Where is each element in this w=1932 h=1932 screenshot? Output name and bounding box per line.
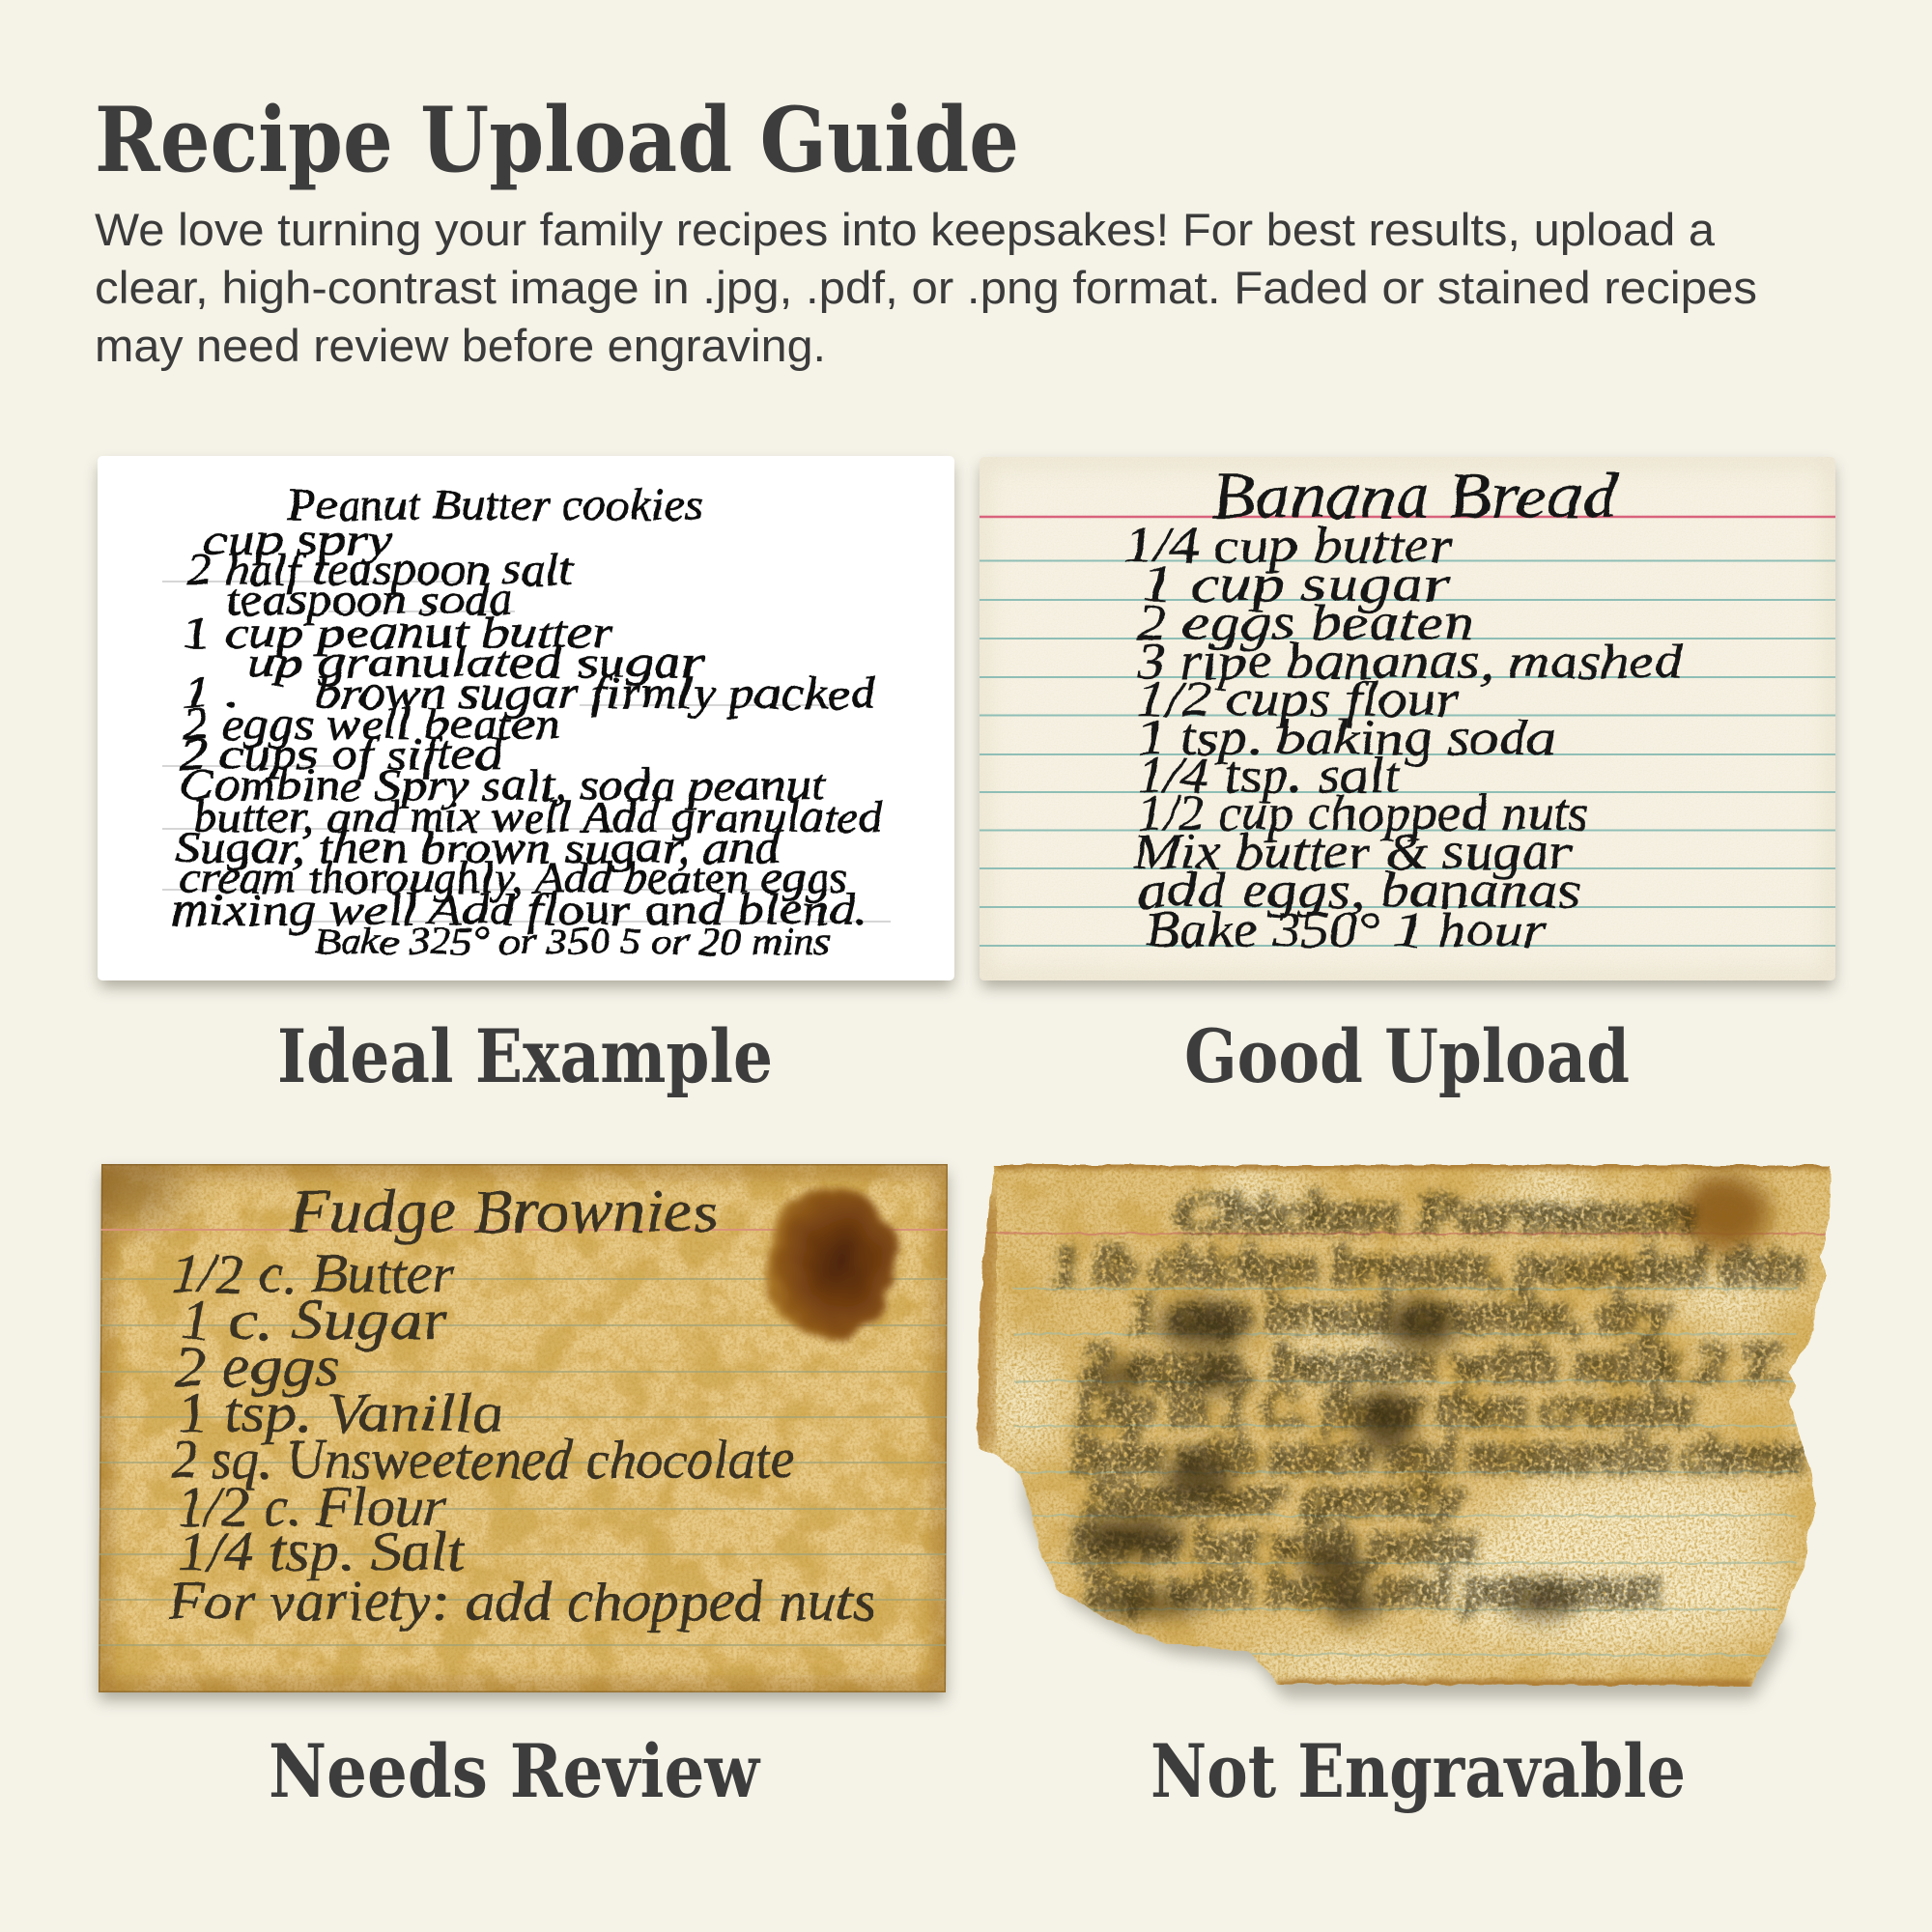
blurred illegible handwriting: Top with basil and parmesan bbox=[1082, 1558, 1662, 1616]
handwritten recipe: banana bread: 1/2 cups flour bbox=[1137, 671, 1458, 727]
handwritten recipe: fudge brownies: 2 sq. Unsweetened chocolate bbox=[171, 1428, 794, 1491]
handwritten recipe: banana bread: Mix butter & sugar bbox=[1132, 824, 1572, 880]
handwritten recipe: fudge brownies: 1/2 c. Butter bbox=[171, 1242, 454, 1305]
handwritten recipe: banana bread: 1/2 cup chopped nuts bbox=[1137, 785, 1589, 841]
handwritten recipe: fudge brownies bbox=[167, 1177, 875, 1633]
handwritten recipe: fudge brownies: 1/4 tsp. Salt bbox=[177, 1520, 466, 1582]
blurred illegible handwriting: Serve hot with pasta bbox=[1072, 1514, 1478, 1572]
handwritten recipe: banana bread: add eggs, bananas bbox=[1137, 863, 1581, 919]
handwritten recipe: peanut butter cookies: 1 . bbox=[183, 668, 241, 719]
panel: ideal example card bbox=[98, 456, 954, 987]
intro paragraph bbox=[95, 204, 1757, 371]
handwritten recipe: banana bread: 1 cup sugar bbox=[1142, 556, 1449, 612]
panel: good upload card bbox=[980, 457, 1835, 987]
blurred illegible handwriting: Chicken Parmesan bbox=[1176, 1184, 1697, 1242]
handwritten recipe: fudge brownies: For variety: add chopped nuts bbox=[167, 1570, 875, 1633]
intro paragraph: may need review before engraving. bbox=[95, 320, 826, 371]
handwritten recipe: fudge brownies: Fudge Brownies bbox=[289, 1177, 718, 1245]
handwritten recipe: peanut butter cookies: Combine Spry salt, soda peanut bbox=[180, 760, 827, 810]
ink bleed blotches bbox=[1077, 1300, 1574, 1621]
handwritten recipe: peanut butter cookies: 2 eggs well beaten bbox=[183, 699, 559, 750]
handwritten recipe: peanut butter cookies: Peanut Butter cookies bbox=[286, 480, 703, 530]
handwritten recipe: fudge brownies: 1 c. Sugar bbox=[180, 1289, 448, 1351]
handwritten recipe: peanut butter cookies: 2 cups of sifted bbox=[180, 729, 503, 780]
handwritten recipe: banana bread: 1/4 tsp. salt bbox=[1137, 748, 1401, 804]
handwritten recipe: peanut butter cookies: butter, and mix well Add granulated bbox=[193, 792, 883, 842]
handwritten recipe: banana bread: 2 eggs beaten bbox=[1136, 595, 1474, 651]
label: ideal example: Ideal Example bbox=[277, 1013, 773, 1099]
handwritten recipe: peanut butter cookies: 1 cup peanut butter bbox=[183, 608, 614, 658]
handwritten recipe: peanut butter cookies: cup spry bbox=[203, 515, 392, 565]
handwritten recipe: banana bread bbox=[1124, 459, 1684, 958]
blurred illegible handwriting: Bake with sauce and mozzarella cheese bbox=[1072, 1425, 1806, 1483]
label: good upload: Good Upload bbox=[1184, 1013, 1630, 1099]
handwritten recipe: peanut butter cookies bbox=[171, 480, 883, 962]
blurred illegible handwriting bbox=[1053, 1184, 1806, 1616]
intro paragraph: clear, high-contrast image in .jpg, .pdf, or .png format. Faded or stained recipes bbox=[95, 262, 1757, 313]
handwritten recipe: fudge brownies: 1/2 c. Flour bbox=[177, 1475, 445, 1538]
handwritten recipe: peanut butter cookies: brown sugar firmly packed bbox=[315, 668, 877, 719]
handwritten recipe: peanut butter cookies: 2 half teaspoon salt bbox=[187, 545, 574, 595]
intro paragraph: We love turning your family recipes into keepsakes! For best results, upload a bbox=[95, 204, 1716, 255]
coffee stain bbox=[1680, 1174, 1769, 1251]
handwritten recipe: peanut butter cookies: Sugar, then brown sugar, and bbox=[174, 823, 781, 873]
handwritten recipe: fudge brownies: 1 tsp. Vanilla bbox=[177, 1381, 503, 1444]
blurred illegible handwriting: 2 eggs, beaten with milk 2 T. bbox=[1082, 1334, 1787, 1392]
handwritten recipe: banana bread: 1 tsp. baking soda bbox=[1137, 710, 1556, 766]
light faded patches bbox=[990, 1166, 1787, 1688]
label: not engravable: Not Engravable bbox=[1151, 1728, 1686, 1814]
panel: not engravable torn card bbox=[966, 1154, 1845, 1698]
handwritten recipe: peanut butter cookies: teaspoon soda bbox=[226, 575, 514, 625]
handwritten recipe: peanut butter cookies: Bake 325° or 350 5 or 20 mins bbox=[315, 922, 831, 962]
handwritten recipe: banana bread: 1/4 cup butter bbox=[1124, 518, 1453, 574]
blurred illegible handwriting: Simmer gently bbox=[1087, 1467, 1463, 1525]
panel: needs review card bbox=[68, 1153, 949, 1700]
blurred illegible handwriting: 1 lb chicken breasts, pounded thin bbox=[1053, 1236, 1806, 1294]
handwritten recipe: banana bread: Banana Bread bbox=[1212, 459, 1618, 532]
handwritten recipe: peanut butter cookies: up granulated sugar bbox=[247, 638, 704, 688]
coffee stain bbox=[765, 1188, 896, 1339]
title: Recipe Upload Guide bbox=[95, 87, 1019, 192]
handwritten recipe: banana bread: Bake 350° 1 hour bbox=[1145, 902, 1545, 958]
handwritten recipe: fudge brownies: 2 eggs bbox=[174, 1335, 339, 1398]
label: needs review: Needs Review bbox=[269, 1728, 760, 1814]
handwritten recipe: peanut butter cookies: mixing well Add flour and blend. bbox=[171, 885, 868, 935]
handwritten recipe: banana bread: 3 ripe bananas, mashed bbox=[1136, 634, 1684, 690]
faded rule lines bbox=[1014, 1289, 1797, 1655]
handwritten recipe: peanut butter cookies: cream thoroughly, Add beaten eggs bbox=[180, 853, 848, 903]
blurred illegible handwriting: Dip in 1 C. flour then crumbs bbox=[1076, 1378, 1695, 1436]
blurred illegible handwriting: 1 cup bread crumbs, dry bbox=[1130, 1284, 1671, 1342]
